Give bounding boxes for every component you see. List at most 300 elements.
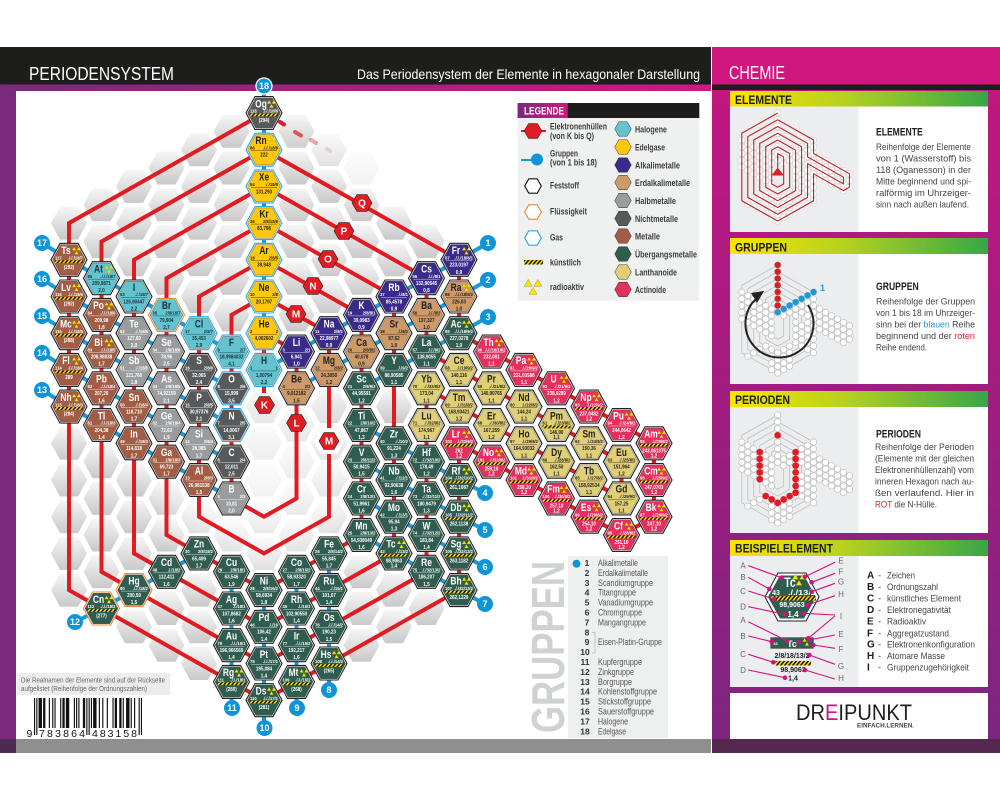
O: O xyxy=(228,374,235,386)
At: ./././18/7 xyxy=(100,274,116,279)
Xe: ././18/8 xyxy=(265,182,279,187)
Ni: 28 xyxy=(250,586,255,591)
V: 23 xyxy=(348,457,353,462)
Ru: 101,07 xyxy=(322,593,336,599)
diagram: large example hex: 98,9063 xyxy=(779,602,805,609)
Zn: 1,7 xyxy=(196,563,202,570)
fading shell continuation xyxy=(280,122,330,151)
Tl: 204,38 xyxy=(95,428,109,434)
Rh: 1,4 xyxy=(293,618,300,625)
diagram: group order: 1 xyxy=(820,283,825,293)
Th: Th xyxy=(483,337,494,349)
text: Elemente: sinn nach außen laufend. xyxy=(876,200,969,210)
Mg xyxy=(311,353,347,386)
V: 2/8/11/2 xyxy=(361,457,376,462)
U xyxy=(538,372,574,405)
text: Gruppen: Reihe endend. xyxy=(876,342,927,354)
card: logo xyxy=(730,693,988,739)
P: 15 xyxy=(185,402,190,407)
left content background xyxy=(0,47,711,753)
legend item: groups xyxy=(521,149,597,168)
Er: 68 xyxy=(478,421,483,426)
Yb xyxy=(408,372,444,405)
C: 2,5 xyxy=(228,471,235,478)
Cr: 2/8/13/1 xyxy=(360,494,376,499)
key list: Gruppenzugehörigkeit xyxy=(887,663,969,674)
No: No xyxy=(483,447,494,459)
Cu: Cu xyxy=(226,557,237,569)
legend item: shells: (von K bis Q) xyxy=(550,131,594,142)
In: 1,7 xyxy=(131,453,137,459)
K: 19 xyxy=(348,310,353,316)
Cn: Cn xyxy=(93,594,104,606)
Co: 58,93320 xyxy=(287,574,306,581)
W: 1,4 xyxy=(423,545,430,551)
Bh: Bh xyxy=(450,575,462,588)
Pr: 140,90765 xyxy=(481,391,502,397)
Ta: ././32/11/2 xyxy=(422,494,441,499)
Fr xyxy=(441,243,477,276)
Np: ././22/9/2 xyxy=(587,402,604,407)
Be: 9,012182 xyxy=(287,391,306,397)
title: PERIODENSYSTEM xyxy=(29,64,174,84)
legend item: shells: Elektronenhüllen xyxy=(550,122,607,133)
H: H xyxy=(261,355,267,368)
Pd: 46 xyxy=(250,622,255,628)
text: Gruppen: Reihenfolge der Gruppen xyxy=(876,296,975,307)
Pa: ././20/9/2 xyxy=(522,365,539,371)
group list marker xyxy=(572,560,580,568)
Ag: 107,8682 xyxy=(222,611,241,618)
C: 2/4 xyxy=(240,457,246,462)
Fe: 1,7 xyxy=(326,563,332,570)
Hg xyxy=(116,574,152,607)
key list: - xyxy=(878,594,881,605)
Po: ./././18/6 xyxy=(100,310,116,316)
diagram: small example bar: Tc xyxy=(787,639,797,649)
Sn: 118,710 xyxy=(126,409,142,416)
Si xyxy=(181,427,217,460)
diagram: large example hex: Tc xyxy=(784,574,796,590)
Ra: 226,03 xyxy=(452,299,466,306)
diagram: large example hex: 43 xyxy=(772,590,780,597)
Og: ./././18/8 xyxy=(263,109,279,114)
Li: 6,941 xyxy=(291,354,302,361)
group number badges: 5 xyxy=(482,525,488,535)
Nh: (284) xyxy=(64,411,75,418)
Na: 22,98977 xyxy=(320,336,339,342)
Fe: 2/8/14/2 xyxy=(328,549,344,554)
V xyxy=(344,445,380,478)
Lu: 1,1 xyxy=(423,435,430,441)
Ts: (292) xyxy=(64,265,75,271)
barcode xyxy=(26,698,142,740)
B: 2,0 xyxy=(228,508,235,515)
group number badges: 16 xyxy=(37,274,47,284)
Ho: Ho xyxy=(518,429,530,441)
Cm: 1,2 xyxy=(651,490,657,496)
Ho: 67 xyxy=(510,439,515,444)
Ne: 20,1797 xyxy=(256,299,272,306)
Cr: 1,6 xyxy=(358,508,365,515)
shell labels: M xyxy=(292,310,300,320)
diagram: N shell xyxy=(739,412,853,526)
callout letters: C xyxy=(740,587,746,596)
Ag: Ag xyxy=(226,594,237,606)
Ag: 1,6 xyxy=(228,618,235,625)
callout letters xyxy=(740,556,844,683)
Po: 1,8 xyxy=(98,325,105,331)
Zn xyxy=(181,537,217,570)
key list: Zeichen xyxy=(887,570,915,581)
background hexagon grid xyxy=(51,115,444,680)
Bi xyxy=(84,335,120,368)
Mc: Mc xyxy=(60,319,72,331)
Ac: ./././18/9/2 xyxy=(454,329,474,334)
Eu: Eu xyxy=(616,447,627,459)
Ga: 69,723 xyxy=(160,464,174,471)
Cf: 251,10 xyxy=(615,540,629,546)
Pr: Pr xyxy=(487,374,496,386)
Zr: Zr xyxy=(390,429,398,441)
S: 16 xyxy=(185,365,190,371)
As: 74,92159 xyxy=(157,391,176,397)
Be: Be xyxy=(291,374,302,386)
Mo: 95,94 xyxy=(388,519,400,526)
Sn: Sn xyxy=(129,392,139,404)
callout letters: D xyxy=(740,666,746,675)
Nb: Nb xyxy=(388,465,400,478)
callout letters: I xyxy=(840,612,842,621)
legend item: gas: Gas xyxy=(550,233,563,244)
Te: Te xyxy=(129,319,139,331)
F: 2/7 xyxy=(240,347,246,352)
text: Elemente xyxy=(876,127,971,210)
Tl: ./././18/3 xyxy=(100,421,116,426)
key list: - xyxy=(878,616,881,627)
Sg: Sg xyxy=(451,539,461,551)
Sn xyxy=(116,390,152,423)
At: 2,0 xyxy=(98,288,105,294)
Sn: ././18/4 xyxy=(135,402,149,407)
Ca: 0,9 xyxy=(358,361,365,368)
Pr xyxy=(474,372,510,405)
Ar xyxy=(246,243,282,276)
Hs: Hs xyxy=(321,649,331,661)
key list: Ordnungszahl xyxy=(887,582,938,593)
Ce: 58 xyxy=(445,365,450,371)
In: 114,818 xyxy=(126,446,142,452)
shell labels: L xyxy=(293,418,300,430)
legend item: shells xyxy=(521,122,607,142)
I: 2,2 xyxy=(131,306,137,313)
group names: Eisen-Platin-Gruppe xyxy=(598,637,662,647)
Al xyxy=(181,464,217,496)
C: C xyxy=(228,447,235,459)
bottom grey bar xyxy=(16,739,711,753)
Th: 1,1 xyxy=(488,361,495,368)
Cm: Cm xyxy=(644,465,658,478)
Na: 11 xyxy=(315,329,320,334)
Sr: Sr xyxy=(390,319,399,331)
N: 14,0067 xyxy=(223,428,240,434)
legend colour labels: Erdalkalimetalle xyxy=(635,178,690,189)
Md: 1,2 xyxy=(521,490,527,496)
Pa xyxy=(506,353,542,386)
Pu: 1,2 xyxy=(618,435,625,441)
Lv xyxy=(51,280,87,313)
Lr: 1,2 xyxy=(456,453,462,459)
Lv: Lv xyxy=(61,282,71,294)
callout lines xyxy=(748,562,835,679)
Os: 1,5 xyxy=(326,637,332,643)
W: 183,84 xyxy=(420,538,434,544)
Dy: 1,1 xyxy=(553,471,560,478)
La xyxy=(408,335,444,368)
heading: Gruppen xyxy=(730,238,988,255)
Ds: (281) xyxy=(259,705,270,711)
Db: Db xyxy=(450,502,462,514)
Ra: Ra xyxy=(451,282,462,294)
group number badges: 14 xyxy=(37,348,47,358)
legend item: groups: (von 1 bis 18) xyxy=(550,158,597,168)
Lr: Lr xyxy=(452,429,460,441)
Cn: ./././18/2 xyxy=(100,604,116,609)
group numbers: 8 xyxy=(585,627,590,637)
H: 1 xyxy=(276,365,279,371)
Ge: Ge xyxy=(161,410,173,423)
Er: ././30/8/2 xyxy=(489,421,506,426)
Ts: Ts xyxy=(61,245,71,257)
Cf xyxy=(604,518,640,552)
Pu: 94 xyxy=(608,421,613,426)
Rh: Rh xyxy=(291,594,302,606)
group names: Kupfergruppe xyxy=(598,657,642,667)
legend panel xyxy=(518,103,699,301)
Y: 88,90585 xyxy=(385,373,404,379)
Nd xyxy=(506,390,542,423)
Ce: 140,116 xyxy=(451,373,467,379)
Yb: 173,04 xyxy=(420,391,434,397)
Rg: ./././18/1 xyxy=(230,677,246,683)
Nb: 1,6 xyxy=(391,490,397,496)
U: 1,2 xyxy=(553,398,560,404)
group number badges: 10 xyxy=(259,723,270,733)
Y: 1,1 xyxy=(391,380,397,386)
group numbers: 18 xyxy=(580,726,590,736)
Sn: 50 xyxy=(120,402,125,407)
Gd: 1,1 xyxy=(618,508,625,515)
K: K xyxy=(358,300,365,313)
Sr: 1,0 xyxy=(391,343,397,349)
Np: Np xyxy=(580,392,592,404)
group numbers: 10 xyxy=(580,647,590,657)
text: Elemente: ralförmig im Uhrzeiger- xyxy=(876,188,971,199)
barcode: 483158 xyxy=(92,728,137,740)
Cf: Cf xyxy=(614,520,624,533)
legend colour labels: Nichtmetalle xyxy=(635,214,678,225)
Co xyxy=(278,555,314,588)
shell labels: O xyxy=(324,254,332,266)
legend item: gas xyxy=(525,231,563,245)
Ac: 1,0 xyxy=(456,343,462,349)
Si: 28,085 xyxy=(192,446,206,452)
legend colour labels: Halbmetalle xyxy=(635,196,676,207)
Rf xyxy=(441,464,477,496)
legend item: solid: Feststoff xyxy=(550,181,580,192)
Th: 90 xyxy=(478,347,483,352)
Np: 237,0482 xyxy=(580,411,599,418)
bottom left corner xyxy=(0,739,16,753)
He: 2 xyxy=(250,329,253,334)
card: Perioden xyxy=(730,391,988,533)
Rh: 45 xyxy=(282,604,288,609)
Th: 232,081 xyxy=(483,354,500,361)
group names: Vanadiumgruppe xyxy=(598,598,653,608)
Nd: Nd xyxy=(518,392,530,404)
Th xyxy=(474,335,510,368)
Os xyxy=(311,610,347,643)
In xyxy=(116,427,152,460)
Nh: 113 xyxy=(55,402,62,407)
Li: 2/1 xyxy=(305,347,311,352)
legend item: artificial xyxy=(524,257,581,268)
group names: Zinkgruppe xyxy=(598,667,634,677)
callout letters: E xyxy=(838,556,844,566)
Ag: ././18/1 xyxy=(233,604,246,609)
Be: 2/2 xyxy=(305,384,311,389)
Nh: Nh xyxy=(60,392,72,404)
Lr xyxy=(441,427,477,460)
Am xyxy=(636,427,672,460)
V: 1,5 xyxy=(358,471,365,478)
Ni: 58,6934 xyxy=(256,593,272,599)
As xyxy=(148,372,184,405)
Kr: 2/8/18/8 xyxy=(263,219,279,224)
group number badges: 11 xyxy=(227,703,237,713)
Md: 258,10 xyxy=(517,485,531,491)
legend item: radioactive xyxy=(524,279,585,294)
Db xyxy=(441,500,477,533)
Rh xyxy=(278,592,314,625)
Re: 1,5 xyxy=(423,582,430,588)
Se: 2/8/18/6 xyxy=(165,347,181,352)
Ne: Ne xyxy=(259,282,270,294)
Re: ././32/13/2 xyxy=(422,567,441,573)
Pm: 1,1 xyxy=(553,435,560,441)
N xyxy=(214,408,250,442)
Re xyxy=(408,555,444,588)
Mc: ./././18/5 xyxy=(68,329,84,334)
As: 2,1 xyxy=(163,398,170,404)
Lv: 116 xyxy=(55,292,62,297)
Og: Og xyxy=(255,98,267,111)
Rn: ./././18/8 xyxy=(263,145,279,150)
Au: 79 xyxy=(218,641,223,646)
text: Elemente: von 1 (Wasserstoff) bis xyxy=(876,154,971,164)
Si: 1,7 xyxy=(196,453,202,459)
Pt: Pt xyxy=(260,649,269,661)
group numbers: 5 xyxy=(585,598,590,608)
Md: 101 xyxy=(510,476,518,481)
N: 7 xyxy=(218,421,220,426)
Tl: 81 xyxy=(88,421,93,426)
Bk: 1,2 xyxy=(651,526,657,533)
B: 2/3 xyxy=(240,494,246,499)
He: He xyxy=(259,319,270,331)
Ru: ././15/1 xyxy=(330,586,344,591)
Rf: ././32/10/2 xyxy=(454,476,474,481)
Y xyxy=(376,353,412,386)
right panel footer xyxy=(712,739,1000,753)
Ir: Ir xyxy=(294,631,300,643)
text: Gruppen: sinn bei der blauen Reihe xyxy=(876,320,975,330)
group number badges: 2 xyxy=(485,275,491,285)
Ar: 39,948 xyxy=(257,262,271,269)
heading: Beispielelement xyxy=(730,540,988,556)
Lr: 103 xyxy=(445,439,453,444)
F xyxy=(214,335,250,368)
Nb: ././12/1 xyxy=(395,476,409,481)
Cm: 96 xyxy=(640,476,645,481)
Hf: 178,49 xyxy=(420,464,434,471)
F: 4,1 xyxy=(228,361,235,368)
Ga xyxy=(148,445,184,478)
Re: 75 xyxy=(412,567,418,573)
Ga: 2/8/18/3 xyxy=(165,457,181,462)
Tl: Tl xyxy=(98,410,105,423)
Ir: 192,217 xyxy=(288,648,305,654)
Ca: 20 xyxy=(348,347,353,352)
Rg: Rg xyxy=(223,667,234,680)
Cd: ././18/2 xyxy=(168,567,181,573)
group numbers: 3 xyxy=(585,578,590,588)
Lu: 71 xyxy=(412,421,418,426)
Y: ././9/2 xyxy=(398,365,409,371)
Fr: 223,0197 xyxy=(450,262,469,269)
right panel background xyxy=(712,47,1000,753)
Fl: Fl xyxy=(62,355,70,368)
Lu: ././32/9/2 xyxy=(424,421,441,426)
Hf: Hf xyxy=(422,447,432,459)
Cd xyxy=(148,555,184,588)
Cm xyxy=(636,464,672,496)
Gd xyxy=(604,482,640,515)
Br xyxy=(148,298,184,331)
callout letters: H xyxy=(838,590,844,599)
group names: Borgruppe xyxy=(598,677,632,687)
Cl: 2/8/7 xyxy=(204,329,214,334)
Ta: 180,9479 xyxy=(417,501,436,507)
group numbers: 6 xyxy=(585,608,590,618)
Mo: ././13/1 xyxy=(395,512,409,517)
Rh: 102,90550 xyxy=(286,611,307,618)
Sr: ././8/2 xyxy=(398,329,409,334)
Ds: 110 xyxy=(250,696,257,701)
Be: 1,5 xyxy=(293,398,300,404)
Pa: 91 xyxy=(510,365,515,371)
Yb: Yb xyxy=(421,374,432,386)
Gd: 157,25 xyxy=(615,501,629,507)
No: 259,10 xyxy=(485,466,499,473)
Al: 26,981538 xyxy=(188,483,210,489)
Ti: 22 xyxy=(348,421,353,426)
callout letters: G xyxy=(838,662,844,671)
Eu: 1,2 xyxy=(618,471,625,478)
group number badges: 13 xyxy=(37,385,47,395)
Rb: 37 xyxy=(380,292,385,297)
Au xyxy=(214,629,250,662)
